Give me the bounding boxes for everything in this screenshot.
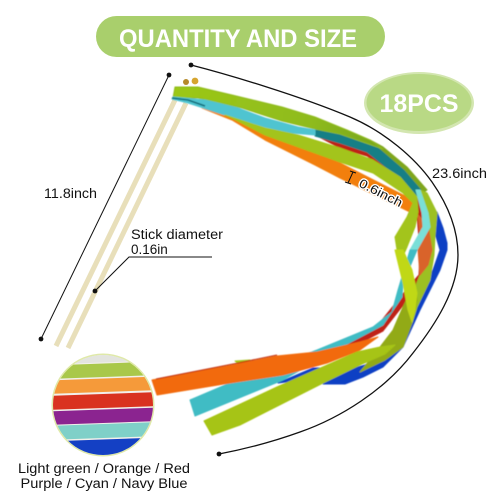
- ribbon: navy blue: [323, 212, 447, 384]
- ribbon: green peek behind orange: [235, 360, 250, 365]
- ribbon: orange lower: [152, 337, 378, 395]
- colour list caption: Purple / Cyan / Navy Blue: [20, 476, 188, 491]
- title banner: QUANTITY AND SIZE: [119, 25, 357, 53]
- ribbon: red edge: [156, 355, 277, 379]
- ribbon: upper light green: [173, 87, 383, 149]
- ribbon: outer green strand: [405, 190, 437, 323]
- ribbon: light green middle with fold: [225, 115, 418, 256]
- ribbon: cyan upper: [172, 97, 315, 135]
- dimension arc: ribbon length: [189, 63, 458, 456]
- colour list caption: Light green / Orange / Red: [18, 461, 190, 476]
- ribbon: olive fold: [360, 283, 417, 372]
- ribbon: light green lower: [204, 345, 395, 435]
- ribbon: orange upper: [202, 106, 413, 212]
- ribbon: red: [310, 132, 426, 348]
- dimension line: stick length: [39, 73, 171, 341]
- colour list caption: [18, 461, 190, 491]
- ribbon: navy lining: [172, 98, 205, 106]
- bells: [183, 78, 198, 85]
- wooden sticks: [56, 100, 186, 348]
- label: 23.6inch: 23.6inch: [432, 166, 487, 181]
- quantity badge: 18PCS: [364, 72, 474, 134]
- ribbon width callout: 0.6inch: [345, 171, 405, 210]
- ribbon: navy blue strip: [278, 368, 320, 383]
- colour swatch lens: [50, 350, 156, 460]
- ribbon: cyan lower: [190, 250, 417, 416]
- ribbon: lime twist: [395, 250, 417, 322]
- ribbon: teal shade: [315, 130, 425, 197]
- ribbon: upper green tip: [370, 140, 427, 192]
- ribbon: light cyan strand: [410, 190, 430, 250]
- ribbon width callout: 0.6inch: 0.6inch: [357, 176, 405, 210]
- quantity badge: 18PCS: 18PCS: [380, 90, 458, 118]
- ribbons: [152, 87, 447, 435]
- ribbon: orange strand: [418, 215, 432, 275]
- title banner: [96, 16, 385, 57]
- label: 11.8inch: 11.8inch: [44, 186, 97, 201]
- stick diameter callout: 0.16in: [131, 242, 168, 257]
- stick diameter callout: Stick diameter: [131, 227, 224, 242]
- stick diameter callout: [93, 227, 224, 293]
